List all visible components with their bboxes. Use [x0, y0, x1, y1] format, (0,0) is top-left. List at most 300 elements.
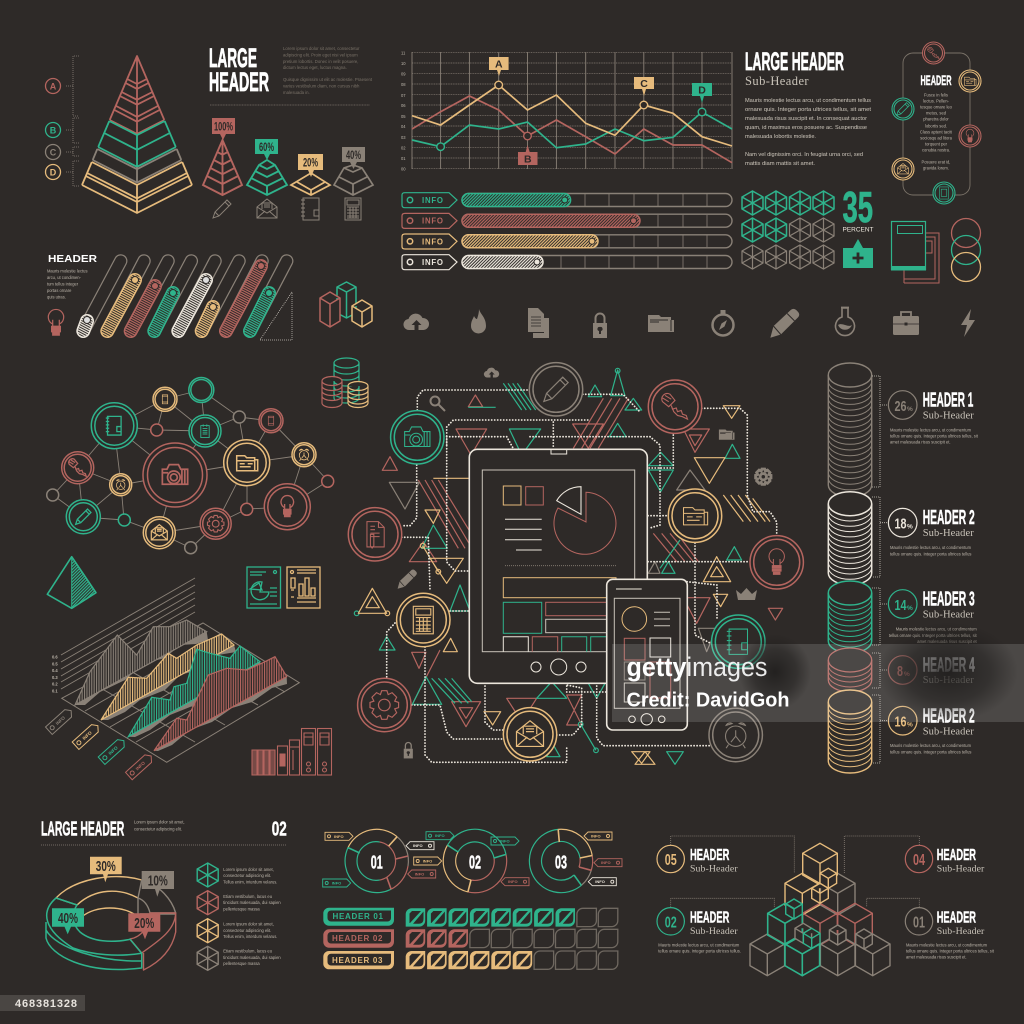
tablet squares — [503, 486, 543, 505]
item: header 2 16%: 16 — [894, 714, 906, 731]
legend labels A to D: C — [50, 148, 57, 158]
body text: quam, id maximus eros posuere ac. Suspendisse — [745, 125, 867, 131]
percent label: PERCENT — [842, 226, 874, 234]
icon: binders — [252, 728, 332, 775]
cube label 02: HEADER — [690, 909, 730, 926]
cube label 02 — [657, 908, 741, 954]
axis values — [52, 654, 58, 694]
tag 10% — [142, 871, 174, 897]
bars text — [47, 268, 88, 300]
icon: flask — [836, 308, 855, 336]
item: header 1 26% — [888, 390, 979, 444]
cube label 02: Mauris molestie lectus arcu, ut condimentum — [658, 942, 740, 948]
intro text block: Quisque dignissim ut elit ac molestie. Praesent — [283, 77, 373, 82]
row green: INFO — [422, 196, 443, 205]
cube label 01: HEADER — [937, 909, 976, 926]
badge: screw — [648, 380, 702, 433]
tablet — [469, 449, 647, 683]
tag 30%: 30% — [96, 858, 116, 875]
axis values: 0.2 — [52, 682, 58, 686]
angled info tags: INFO — [81, 730, 93, 741]
cube label 05: Sub-Header — [690, 864, 738, 875]
panel: donut percent chart — [41, 819, 287, 970]
sub header: Sub-Header — [745, 74, 809, 88]
icon: folder — [648, 315, 674, 332]
tag 40% — [52, 908, 84, 934]
item: header 3 14%: Sub-Header — [923, 609, 974, 620]
triangles and hatching — [354, 368, 783, 764]
cube label 04: HEADER — [937, 847, 976, 864]
badge: folder — [668, 489, 722, 542]
intro text block: malesuada in. — [283, 90, 310, 95]
frame text: pharetra dolor — [923, 116, 949, 122]
frame icons — [892, 42, 981, 204]
badge: bulb — [750, 536, 803, 589]
network tan nodes — [110, 387, 316, 549]
bottom intro text: Lorem ipsum dolor sit amet, — [134, 820, 185, 824]
chart axis labels: 08 — [401, 82, 406, 87]
intro text block: adipiscing elit. Proin eget nisi vel ipsum — [283, 52, 358, 58]
item: header 4 8%: 8 — [897, 663, 903, 680]
item: header 3 14%: 14 — [894, 597, 907, 614]
chart axis labels: 00 — [401, 166, 406, 172]
frame text: tesque ornare leo — [920, 104, 953, 110]
circle icon badges — [348, 363, 803, 762]
header pills: HEADER 01 — [332, 912, 384, 921]
tag 100%: 100% — [214, 120, 233, 134]
capsule tracks — [83, 261, 287, 331]
big number 35: 35 — [842, 183, 873, 232]
dotted connectors — [387, 390, 777, 762]
item: header 1 26%: % — [907, 406, 913, 413]
chart axis labels: 06 — [401, 103, 406, 108]
legend text: Etiam vestibulum, lacus eu — [223, 949, 272, 954]
panel: header pills and leaf tiles — [323, 908, 618, 969]
cylinder red segment — [828, 648, 872, 692]
red series — [412, 96, 732, 163]
item: header 2 18%: Mauris molestie lectus arcu, ut condimentum — [890, 545, 972, 550]
legend text — [223, 867, 281, 966]
row tan — [402, 234, 598, 249]
callout A: A — [495, 58, 503, 70]
tag 60%: 60% — [259, 140, 274, 154]
callout B — [518, 145, 538, 166]
item: header 2 16% — [888, 706, 975, 754]
chart markers — [437, 81, 706, 150]
ring 01: 01 — [371, 852, 383, 872]
header pills — [323, 908, 394, 969]
bottom header: LARGE HEADER — [41, 819, 125, 841]
cylinder green segment — [828, 581, 872, 653]
red stack — [322, 376, 342, 408]
legend text: Etiam vestibulum, lacus eu — [223, 894, 272, 899]
axis values: 0.5 — [52, 662, 58, 666]
intro text block: dictum lectus eget, luctus magna. — [283, 65, 347, 70]
back grid lines — [61, 578, 195, 689]
tag 20% — [298, 154, 323, 177]
tan stack — [348, 382, 368, 408]
icon: flame — [471, 309, 486, 334]
item: header 2 16%: tellus ornare quis. Integer porta ultrices tellus — [890, 750, 971, 754]
ring info tags: INFO — [601, 860, 611, 865]
connectors — [671, 836, 919, 907]
tan area series — [101, 634, 234, 720]
network red nodes — [62, 409, 334, 539]
legend text: Lorem ipsum dolor sit amet, — [223, 867, 274, 872]
body text: Mauris molestie lectus arcu, ut condimentum tellus — [745, 98, 871, 104]
panel: hexagon percent grid — [742, 183, 874, 269]
cube label 02: Sub-Header — [690, 926, 738, 937]
ring info tags: INFO — [435, 833, 445, 838]
item: header 2 18%: % — [907, 524, 913, 531]
icon: compass — [712, 310, 734, 336]
image id box — [0, 995, 85, 1011]
bars text: tum tellus integer — [47, 282, 79, 286]
3D donut — [46, 877, 176, 970]
chart axis labels: 11 — [401, 50, 406, 56]
panel: stacked cylinder chart — [828, 363, 888, 773]
icon: stacked books — [891, 222, 939, 283]
panel: isometric area chart — [46, 578, 299, 780]
frame text: metus, sed — [926, 110, 947, 116]
large header and body copy top right — [745, 48, 872, 167]
ring info tags: INFO — [413, 843, 423, 848]
ring info tags: INFO — [415, 872, 424, 876]
chart grid — [412, 52, 732, 169]
watermark text: gettyimages — [626, 652, 768, 682]
panel: icon network — [47, 378, 334, 554]
legend text: pellentesque massa — [223, 906, 260, 911]
ring 03: 03 — [555, 852, 567, 872]
body text: mattis diam mattis sit amet. — [745, 161, 815, 167]
callout C — [634, 77, 654, 96]
intro text block — [283, 46, 373, 95]
bars text: arcu, ut condimen- — [47, 275, 82, 280]
callout D: D — [698, 84, 706, 96]
base grid — [62, 623, 299, 762]
cube label 01: Mauris molestie lectus arcu, ut condimentum — [906, 942, 988, 948]
chart axis labels: 10 — [401, 61, 406, 66]
badge: gear — [358, 678, 411, 732]
frame text: gravida lorem. — [923, 166, 949, 170]
badge: calculator — [397, 593, 450, 647]
ring 02 — [443, 829, 507, 893]
item: header 3 14%: HEADER 3 — [923, 589, 975, 611]
icon: lock — [593, 314, 607, 338]
ring 01 — [345, 829, 408, 893]
network green nodes — [66, 378, 221, 534]
tag 100% — [212, 118, 235, 140]
cylinder tan segment — [828, 690, 872, 773]
item: header 2 18%: 18 — [894, 516, 906, 533]
frame text: lobortis sed. — [925, 124, 947, 128]
tan series — [412, 85, 732, 146]
isometric 3D bar blocks — [320, 282, 372, 327]
panel: rounded frame with icons — [892, 42, 981, 204]
ring info tags: INFO — [334, 834, 344, 839]
shadows — [75, 632, 208, 705]
item: header 4 8%: HEADER 4 — [923, 655, 975, 677]
row tan: INFO — [422, 237, 443, 246]
body text: Nam vel dignissim orci. In feugiat urna orci, sed — [745, 152, 863, 158]
item: header 2 16%: HEADER 2 — [923, 706, 975, 728]
hexagons — [742, 191, 834, 269]
green stepped pyramid — [247, 160, 287, 195]
bars header: HEADER — [48, 253, 97, 265]
icon: dashboard cards — [247, 567, 320, 608]
chart axis labels: 03 — [401, 135, 406, 140]
tag 40%: 40% — [346, 148, 361, 162]
item: header 4 8%: Sub-Header — [923, 675, 974, 686]
axis values: 0.1 — [52, 688, 58, 694]
chart axis labels: 09 — [401, 72, 406, 76]
phone — [607, 579, 687, 730]
large header top left — [209, 43, 269, 97]
cube label 05: 05 — [665, 852, 677, 869]
item: header 2 16%: Sub-Header — [923, 726, 974, 737]
pyramid — [82, 56, 192, 213]
bottom intro text — [134, 820, 185, 832]
angled info tags: INFO — [107, 745, 119, 756]
watermark text — [626, 652, 790, 712]
page number: 02 — [272, 819, 287, 841]
item: header 2 16%: % — [907, 722, 913, 729]
badge: mail — [503, 708, 557, 761]
watermark band — [612, 622, 1024, 722]
legend text: tincidunt malesuada, dui sapien — [223, 955, 281, 960]
body text: ornare quis. Integer porta ultrices tellus, sit amet — [745, 107, 872, 113]
item: header 2 18%: tellus ornare quis. Integer porta ultrices tellus — [890, 552, 971, 556]
cube label 01: tellus ornare quis. Integer porta ultrices tellus, sit — [906, 948, 995, 954]
item: header 3 14%: amet malesuada risus suscipit et — [917, 639, 978, 644]
tag 40%: 40% — [58, 910, 78, 927]
tag 60% — [255, 139, 278, 160]
small filled icons — [398, 368, 771, 758]
item: header 2 16%: Mauris molestie lectus arcu, ut condimentum — [890, 743, 972, 748]
empty leaf tiles — [470, 908, 618, 969]
network grey nodes — [47, 411, 245, 554]
legend text: Tellus enim, interdum velarus. — [223, 934, 277, 939]
grey stepped pyramid — [334, 165, 373, 195]
tablet layout blocks — [503, 578, 616, 652]
ring info tags: INFO — [591, 834, 601, 838]
item: header 2 18% — [888, 507, 975, 556]
icon: bulb — [48, 309, 64, 335]
frame text: lectus. Pellen- — [923, 98, 949, 104]
plus badge — [843, 239, 873, 268]
row red — [402, 213, 640, 228]
badge: document — [348, 508, 402, 561]
callout B: B — [524, 154, 532, 166]
callout D — [692, 83, 712, 103]
badge: alarm clock — [709, 708, 762, 762]
callout A — [489, 57, 509, 76]
panel: three ring charts — [323, 829, 622, 893]
icon: bolt — [961, 309, 975, 337]
item: header 3 14%: tellus ornare quis. Integer porta ultrices tellus, sit — [889, 633, 978, 638]
ring info tags: INFO — [423, 858, 432, 864]
frame text: Fusce in felis — [924, 92, 948, 98]
cube label 01: 01 — [913, 914, 925, 931]
green series — [412, 112, 732, 148]
intro text block: pretium lobortis. Donec in velit posuere, — [283, 59, 358, 64]
frame text: Class aptent taciti — [920, 130, 952, 134]
legend text: Tellus enim, interdum velarus. — [223, 879, 277, 884]
icon: briefcase — [893, 312, 919, 335]
legend labels A to D: B — [50, 126, 57, 136]
body text: malesuada lobortis molestie. — [745, 134, 816, 140]
row white — [402, 255, 543, 270]
red pyramid — [203, 140, 242, 195]
row green — [402, 193, 571, 208]
cube label 01: Sub-Header — [937, 926, 985, 937]
tan diamond — [291, 173, 330, 195]
bottom intro text: consectetur adipiscing elit. — [134, 826, 182, 832]
legend text: pellentesque massa — [223, 961, 260, 966]
large header and body copy top right: LARGE HEADER — [745, 48, 844, 76]
tablet text lines — [505, 519, 542, 550]
body text — [745, 98, 872, 167]
legend labels A to D — [46, 56, 79, 186]
item: header 4 8% — [888, 655, 975, 686]
icon: cloud upload — [403, 314, 429, 332]
tag 20%: 20% — [134, 915, 154, 932]
item: header 2 18%: HEADER 2 — [923, 507, 975, 529]
green stack — [334, 358, 359, 403]
cube label 04: Sub-Header — [937, 864, 985, 875]
cube label 04: 04 — [913, 852, 925, 869]
frame text: torquent per — [925, 142, 948, 146]
large header top left: HEADER — [209, 67, 269, 97]
cube label 04 — [905, 845, 985, 875]
cylinder white segment — [828, 492, 872, 585]
panel: diagonal capsule bars — [47, 253, 292, 340]
tan leaf row — [406, 951, 532, 969]
legend text: Lorem ipsum dolor sit amet, — [223, 922, 274, 927]
badge: notebook — [712, 615, 765, 668]
legend labels A to D: D — [50, 168, 57, 178]
panel: main pyramid with legend — [46, 56, 192, 213]
tablet buttons — [531, 659, 586, 675]
legend hexagons with text — [197, 863, 281, 970]
cylinder brackets — [872, 376, 888, 763]
frame text: sociosqu ad litora — [920, 136, 953, 140]
image id box: 468381328 — [15, 998, 77, 1010]
red leaf row — [406, 929, 468, 948]
item: header 3 14% — [888, 589, 978, 644]
badge: camera — [391, 411, 444, 464]
item: header 1 26%: 26 — [894, 398, 906, 415]
ring info tags: INFO — [595, 879, 605, 884]
legend text: tincidunt malesuada, dui sapien — [223, 900, 281, 905]
legend text: consectetur adipiscing elit. — [223, 928, 271, 933]
ring 02: 02 — [469, 852, 481, 872]
angled info tags — [46, 707, 154, 780]
icon: documents — [528, 308, 549, 338]
tag 10%: 10% — [148, 872, 168, 890]
intro text block: Lorem ipsum dolor sit amet, consectetur — [283, 46, 360, 51]
overlapping circles — [952, 218, 980, 282]
red area series — [154, 657, 287, 751]
green area series — [128, 646, 260, 737]
dotted triangle — [260, 292, 292, 340]
cube label 02: 02 — [665, 914, 677, 931]
network edges — [53, 390, 328, 548]
callout C: C — [640, 78, 648, 90]
bars text: portas ornare — [47, 288, 72, 293]
ring info tags: INFO — [500, 838, 510, 844]
axis values: 0.4 — [52, 668, 58, 673]
cube label 01: amet malesuada risus suscipit et. — [906, 954, 967, 960]
frame text: conubia nostra. — [922, 148, 950, 152]
intro text block: varius vestibulum diam, non cursus nibh — [283, 84, 360, 88]
frame text: Posuere erat id, — [922, 160, 950, 164]
legend labels A to D: A — [50, 82, 57, 92]
panel: line chart — [401, 50, 732, 172]
watermark text: Credit: DavidGoh — [626, 690, 790, 712]
chart axis labels: 01 — [401, 156, 406, 161]
panel: central device illustration — [348, 363, 803, 764]
icon: pencil — [770, 309, 799, 338]
cube label 01 — [905, 908, 995, 960]
chart axis labels: 05 — [401, 114, 406, 119]
cylinder grey segment — [828, 363, 872, 497]
row white: INFO — [422, 258, 443, 267]
item: header 4 8%: % — [904, 671, 910, 678]
header pills: HEADER 02 — [332, 934, 383, 943]
axis values: 0.3 — [52, 675, 58, 680]
chart axis labels — [401, 50, 406, 172]
tag 20% — [128, 913, 160, 939]
chart axis labels: 04 — [401, 124, 406, 129]
angled info tags: INFO — [55, 715, 66, 726]
item: header 2 18%: Sub-Header — [923, 528, 974, 539]
axis values: 0.6 — [52, 654, 58, 660]
item: header 1 26%: HEADER 1 — [923, 390, 973, 412]
ring info tags: INFO — [508, 879, 518, 884]
tag 30% — [90, 857, 122, 882]
ring 03 — [529, 829, 593, 893]
item: header 3 14%: Mauris molestie lectus arcu, ut condimentum — [896, 626, 977, 632]
bars text: Mauris molestie lectus — [47, 268, 88, 274]
badge: pencil — [529, 363, 583, 416]
mini pyramid icons — [213, 198, 361, 220]
coin stacks — [322, 358, 368, 408]
frame text — [920, 92, 953, 170]
item: header 1 26%: amet malesuada risus suscipit et. — [890, 440, 951, 444]
item: header 1 26%: Sub-Header — [923, 410, 974, 421]
large header top left: LARGE — [209, 43, 257, 73]
icon: green hatched pyramid — [47, 557, 96, 608]
legend text: consectetur adipiscing elit. — [223, 873, 271, 878]
item: header 1 26%: tellus ornare quis. Integer porta ultrices tellus, sit — [890, 434, 979, 438]
cube label 05: HEADER — [690, 847, 730, 864]
cube label 02: tellus ornare quis. Integer porta ultrices tellus. — [658, 948, 741, 954]
panel: cube pyramid — [657, 836, 995, 976]
row red: INFO — [422, 217, 443, 226]
grey area series — [75, 620, 207, 705]
bars text: quis utras. — [47, 294, 66, 300]
ring info tags — [323, 832, 622, 887]
tablet pie chart — [554, 487, 616, 554]
track outlines — [462, 194, 732, 268]
capsule fills — [83, 262, 272, 331]
frame heading: HEADER — [920, 73, 952, 88]
panel: progress bars — [402, 193, 732, 270]
green leaf row — [406, 908, 575, 927]
tag 40% — [342, 147, 365, 169]
body text: malesuada risus suscipit et. In consequat auctor — [745, 116, 867, 122]
